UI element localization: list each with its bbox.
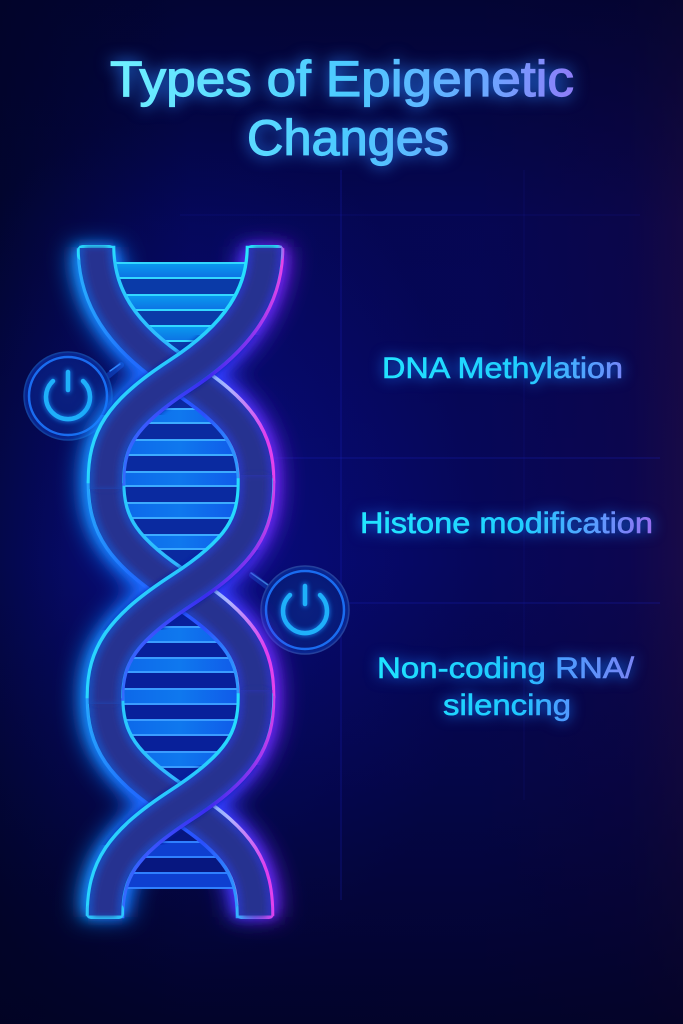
helix glow: [96, 247, 265, 917]
cap: bottom left: [86, 904, 124, 919]
strands passing in front: [86, 245, 284, 919]
rungs: upper middle section: [125, 399, 237, 566]
label: Non-coding RNA/ silencing: [377, 652, 635, 722]
cap: bottom right: [236, 904, 274, 919]
rungs: top section: [116, 262, 244, 351]
strands passing behind: [77, 245, 274, 919]
shadow where the front strand crosses: [102, 335, 260, 845]
rungs: bottom section: [128, 829, 233, 889]
icon: power button right: [251, 566, 349, 654]
rungs: lower middle section: [124, 614, 236, 781]
title: Changes: [247, 110, 449, 166]
title: [110, 51, 574, 166]
label: Histone modification: Histone modification: [360, 507, 653, 540]
cap: top left: [77, 245, 115, 261]
DNA double helix: [77, 245, 284, 919]
label: Non-coding RNA/ silencing: silencing: [443, 689, 571, 722]
cap: top right: [246, 245, 284, 261]
title: Types of Epigenetic: [110, 51, 574, 107]
icon: power button left: [24, 352, 121, 440]
label: DNA Methylation: DNA Methylation: [382, 352, 623, 385]
label: Non-coding RNA/ silencing: Non-coding RNA/: [377, 652, 635, 685]
